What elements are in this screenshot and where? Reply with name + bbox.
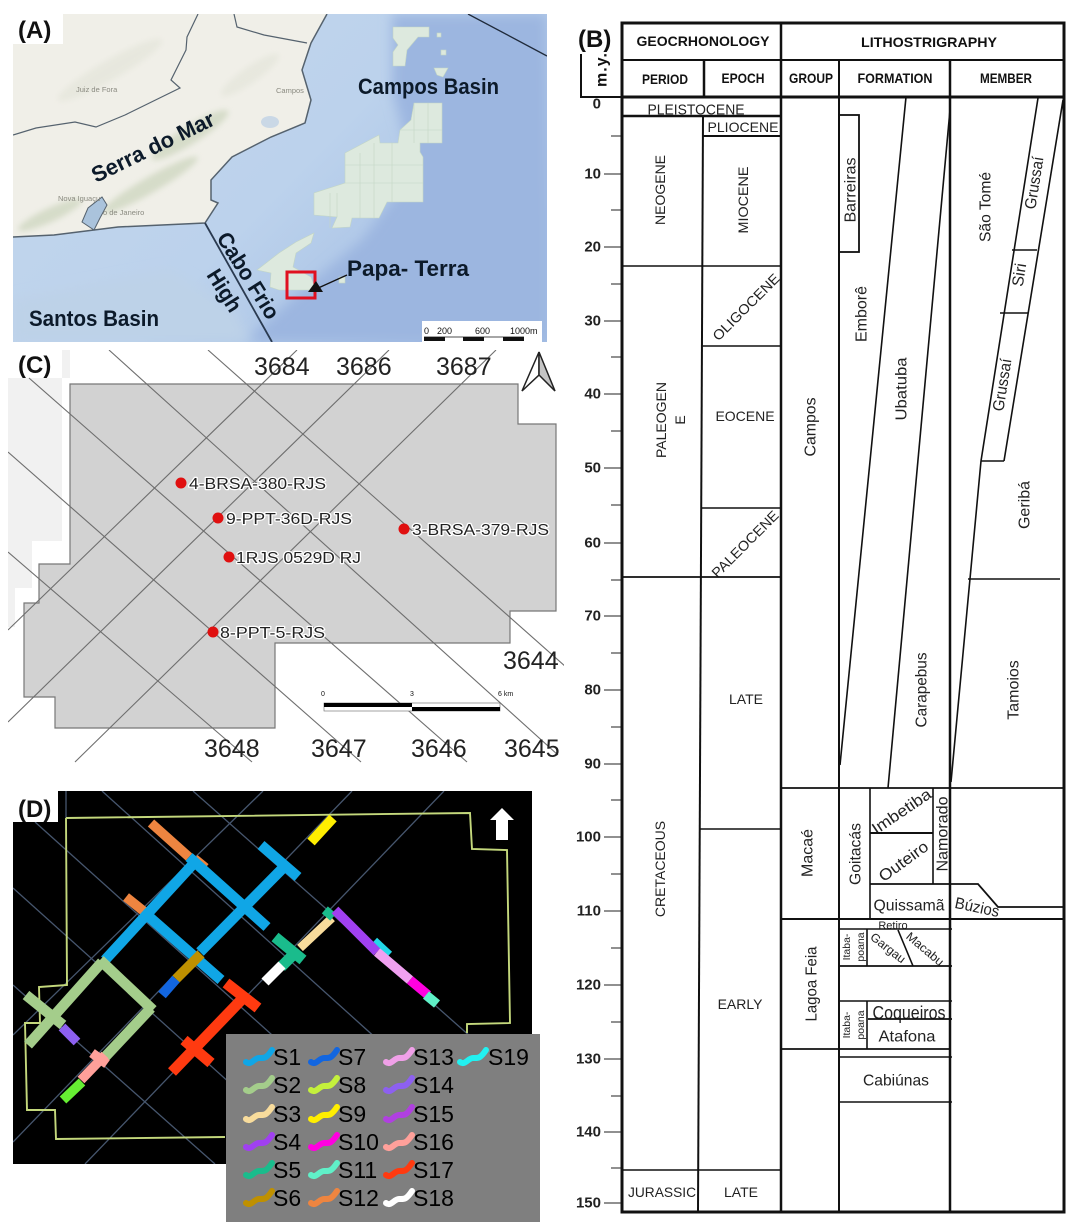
period and epoch labels: PALEOCENE [708, 507, 782, 581]
time axis: 50 [584, 460, 601, 476]
S13 segment [377, 952, 410, 980]
S12 segments [126, 823, 207, 913]
period and epoch labels: CRETACEOUS [652, 821, 668, 917]
table headers [636, 33, 1032, 87]
legend [226, 1034, 540, 1222]
S19 segment [375, 940, 390, 954]
period and epoch labels: EARLY [718, 996, 763, 1012]
line numbers: 3647 [311, 735, 367, 763]
panel B: stratigraphic chart [576, 23, 1064, 1212]
Cabo Frio High line [205, 223, 272, 342]
line numbers: 3645 [504, 735, 560, 763]
m.y. axis title [581, 53, 622, 97]
formation labels [841, 158, 952, 1090]
S4 segment [335, 910, 377, 952]
member labels [953, 155, 1048, 921]
formation labels: Quissamã [874, 898, 945, 914]
wells: 8-PPT-5-RJS [220, 625, 325, 642]
legend: S4 [273, 1129, 301, 1155]
period and epoch labels: OLIGOCENE [709, 270, 783, 344]
table headers: GROUP [789, 70, 833, 86]
wells: 3-BRSA-379-RJS [412, 522, 549, 539]
period and epoch labels: E [672, 415, 688, 425]
S6 segment [176, 954, 201, 979]
panel A: regional location map [13, 14, 547, 342]
block outline polygon [24, 384, 556, 728]
time axis: 150 [576, 1194, 601, 1212]
period and epoch labels [628, 102, 783, 1200]
formation labels: poana [855, 1010, 867, 1040]
period and epoch labels: MIOCENE [735, 166, 751, 234]
legend: S10 [338, 1129, 379, 1155]
label High: High [202, 264, 247, 317]
formation labels: Coqueiros [872, 1003, 946, 1023]
time axis: 100 [576, 828, 601, 846]
time axis: 90 [584, 756, 601, 772]
north arrow D [490, 808, 514, 840]
member labels: São Tomé [978, 172, 994, 242]
wells [176, 476, 549, 642]
group labels: Campos [802, 398, 820, 456]
line numbers: 3684 [254, 353, 310, 381]
table headers: GEOCRHONOLOGY [636, 33, 770, 49]
formation labels: Outeiro [876, 838, 932, 886]
legend: S8 [338, 1072, 366, 1098]
table headers: MEMBER [980, 70, 1032, 86]
period and epoch labels: LATE [724, 1184, 758, 1200]
member labels: Geribá [1016, 481, 1034, 529]
S7 segment [162, 979, 176, 995]
scale bar A [422, 321, 542, 342]
S3 segment [300, 918, 332, 948]
time axis: 110 [577, 902, 601, 920]
legend: S16 [413, 1129, 454, 1155]
table headers: FORMATION [858, 70, 932, 86]
member labels: Siri [1010, 262, 1030, 288]
label C: (C) [18, 352, 51, 379]
S2 segments [26, 960, 153, 1057]
legend: S7 [338, 1044, 366, 1070]
legend: S5 [273, 1157, 301, 1183]
line numbers: 3644 [503, 647, 559, 675]
town names [58, 85, 304, 217]
formation labels: Cabiúnas [863, 1072, 929, 1090]
scale bar C: 3 [410, 691, 414, 698]
period and epoch labels: EOCENE [715, 408, 775, 424]
group labels: Lagoa Feia [804, 946, 820, 1022]
formation labels: Retiro [878, 920, 908, 932]
period and epoch labels: PALEOGEN [653, 382, 669, 458]
label A: (A) [18, 17, 51, 44]
town names: Campos [276, 86, 304, 95]
time axis: 70 [584, 608, 601, 624]
wells: 4-BRSA-380-RJS [189, 476, 326, 493]
period and epoch labels: JURASSIC [628, 1184, 696, 1200]
seismic lines [8, 350, 566, 762]
S8 segment [63, 1082, 82, 1100]
label B: (B) [578, 26, 611, 53]
S1 segments [105, 845, 298, 980]
formation labels: Atafona [878, 1028, 936, 1046]
scale bar A: 0 [424, 326, 429, 336]
panel C: well and seismic line map [8, 350, 566, 764]
legend: S9 [338, 1101, 366, 1127]
legend: S13 [413, 1044, 454, 1070]
formation labels: Barreiras [842, 158, 860, 222]
time axis: 40 [584, 386, 601, 402]
formation labels: Namorado [934, 796, 952, 872]
time axis: 130 [576, 1050, 601, 1068]
S18 segment [265, 965, 282, 982]
time axis: 80 [584, 682, 601, 698]
line numbers: 3686 [336, 353, 392, 381]
study area red box [287, 272, 315, 298]
member labels: Grussaí [990, 357, 1016, 413]
period and epoch labels: PLIOCENE [708, 119, 778, 135]
grid lines [13, 791, 500, 1164]
formation labels: Gargau [868, 930, 908, 966]
town names: o de Janeiro [103, 208, 144, 217]
legend: S15 [413, 1101, 454, 1127]
time axis: 60 [584, 534, 601, 552]
S17 segments [172, 983, 258, 1072]
formation labels: Emborê [854, 286, 870, 342]
panel D: seismic sequences map [13, 791, 540, 1222]
town names: Juiz de Fora [76, 85, 118, 94]
label Serra do Mar: Serra do Mar [87, 106, 219, 187]
legend: S6 [273, 1185, 301, 1211]
time axis: 140 [576, 1124, 601, 1140]
member labels: Grussaí [1022, 155, 1048, 211]
member labels: Tamoios [1006, 660, 1022, 720]
adjacent block [8, 350, 70, 627]
scale bar A: 200 [437, 326, 452, 336]
formation labels: Itaba- [841, 1011, 853, 1038]
legend: S1 [273, 1044, 301, 1070]
table headers: LITHOSTRIGRAPHY [861, 34, 998, 50]
S10 segment [410, 980, 428, 995]
time axis: 0 [593, 96, 601, 112]
formation labels: Goitacás [848, 823, 864, 885]
line numbers: 3687 [436, 353, 492, 381]
label Campos Basin: Campos Basin [358, 74, 499, 99]
line numbers: 3648 [204, 735, 260, 763]
scale bar C [321, 691, 513, 711]
period and epoch labels: PLEISTOCENE [648, 102, 744, 118]
table headers: PERIOD [642, 71, 688, 87]
formation labels: Carapebus [914, 652, 930, 728]
period and epoch labels: NEOGENE [652, 155, 668, 225]
legend: S19 [488, 1044, 529, 1070]
label D: (D) [18, 796, 51, 823]
formation labels: poana [855, 932, 867, 962]
S9 segment [311, 818, 333, 842]
chart frame and divisions [622, 23, 1064, 1212]
legend: S18 [413, 1185, 454, 1211]
group labels [800, 398, 820, 1022]
time axis: 120 [576, 976, 601, 994]
m.y. axis title: m.y. [594, 53, 610, 87]
scale bar A: 1000m [510, 326, 538, 336]
S14 segment [62, 1027, 77, 1042]
time axis: 20 [584, 238, 601, 256]
wells: 1RJS 0529D RJ [236, 550, 361, 567]
formation labels: Imbetiba [869, 786, 935, 838]
block outline [66, 813, 510, 1033]
S5 segments [275, 910, 332, 967]
label D [13, 791, 58, 823]
time axis: 30 [584, 312, 601, 330]
scale bar A: 600 [475, 326, 490, 336]
wells: 9-PPT-36D-RJS [226, 511, 352, 528]
label Papa-Terra: Papa- Terra [347, 256, 470, 281]
oil field blocks [257, 27, 448, 290]
scale bar C: 6 km [498, 691, 513, 698]
scale bar C: 0 [321, 691, 325, 698]
formation labels: Macabu [903, 929, 947, 969]
member labels: Búzios [953, 895, 1001, 921]
formation labels: Itaba- [841, 933, 853, 960]
town names: Nova Iguaçu [58, 194, 100, 203]
table headers: EPOCH [722, 70, 764, 86]
S16 segments [81, 1053, 107, 1080]
time axis [576, 96, 622, 1212]
legend: S14 [413, 1072, 454, 1098]
time axis: 10 [584, 166, 601, 182]
label Santos Basin: Santos Basin [29, 306, 159, 331]
arrow to Papa-Terra [308, 275, 347, 292]
legend: S17 [413, 1157, 454, 1183]
line numbers: 3646 [411, 735, 467, 763]
legend: S11 [338, 1157, 377, 1183]
formation labels: Ubatuba [894, 357, 910, 421]
Guanabara bay [82, 197, 107, 230]
label Cabo Frio: Cabo Frio [212, 227, 285, 324]
group labels: Macaé [800, 829, 816, 877]
label A [13, 14, 63, 44]
S11 segment [426, 995, 437, 1004]
land area [13, 14, 327, 237]
period and epoch labels: LATE [729, 691, 763, 707]
north arrow C [522, 352, 555, 391]
legend: S12 [338, 1185, 379, 1211]
legend: S2 [273, 1072, 301, 1098]
legend: S3 [273, 1101, 301, 1127]
line numbers [204, 353, 560, 763]
